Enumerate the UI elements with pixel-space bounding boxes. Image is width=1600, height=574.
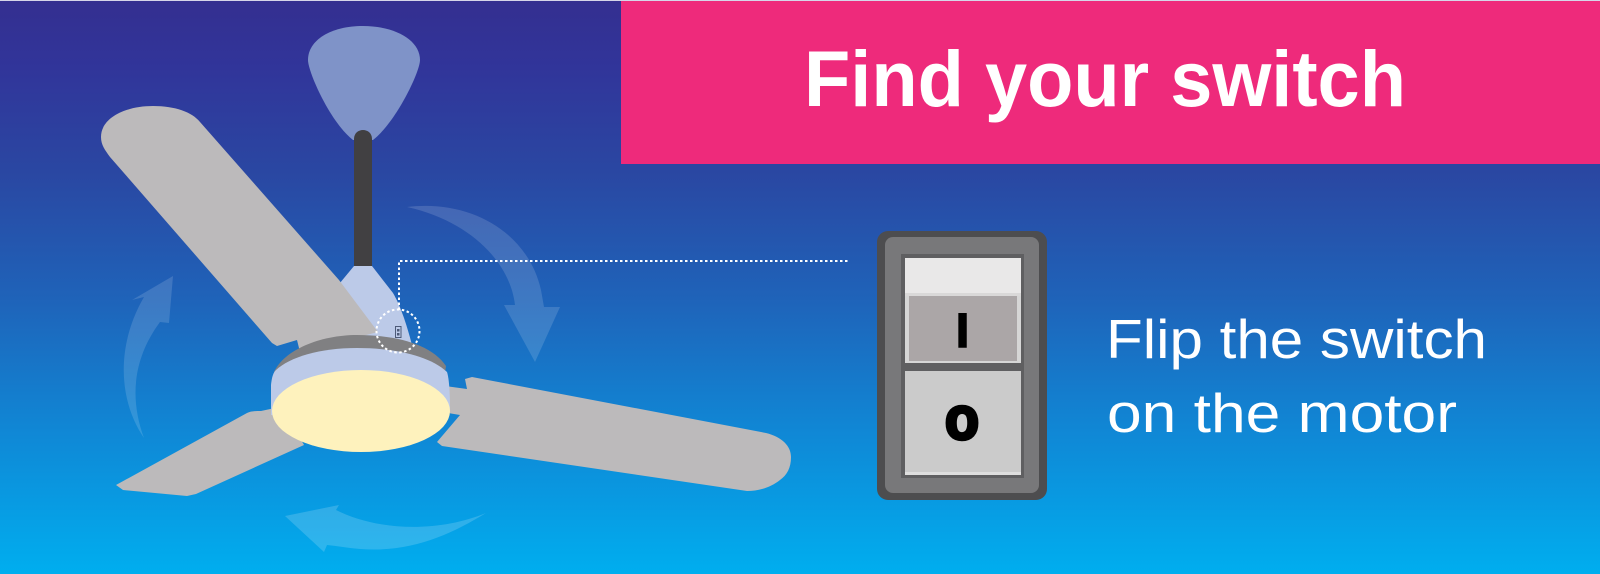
shade canopy: [308, 26, 420, 140]
blade: upper left: [101, 106, 378, 352]
ceiling fan: [101, 26, 791, 552]
arrow: rotation left: [124, 276, 173, 438]
motor grey ring: [274, 335, 446, 385]
arrow: rotation right: [407, 206, 560, 362]
instruction text: Flip the switch: [1106, 308, 1487, 370]
label: o: o: [945, 385, 979, 452]
blade: right: [437, 377, 791, 491]
instruction text: on the motor: [1107, 382, 1457, 444]
instruction text: [1106, 308, 1487, 444]
switch top highlight: [905, 258, 1021, 296]
label: I: I: [956, 305, 969, 358]
light panel: [272, 370, 450, 452]
dotted leader line: [399, 261, 849, 310]
title: Find your switch: [804, 34, 1406, 123]
rocker switch: [877, 231, 1047, 500]
motor neck: [330, 266, 412, 348]
motor lavender band: [271, 348, 450, 415]
blade: lower left: [116, 408, 304, 496]
rocker lower: [905, 371, 1021, 475]
small switch on motor: [396, 326, 401, 338]
title banner: [621, 1, 1600, 164]
stem: [354, 130, 372, 267]
rocker upper: [905, 296, 1021, 363]
arrow: rotation bottom: [285, 505, 486, 552]
dotted circle callout: [376, 310, 420, 352]
